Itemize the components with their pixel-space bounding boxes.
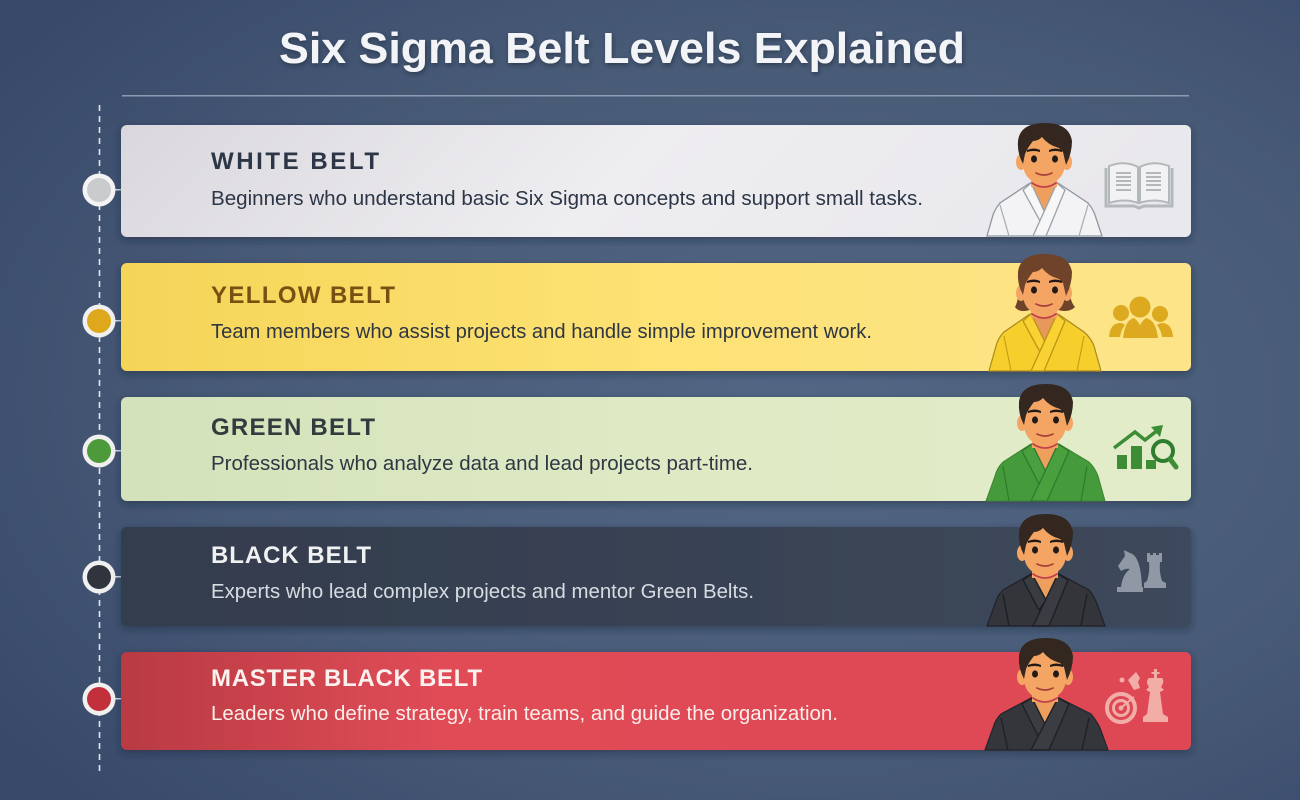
text: black belt description: Experts who lead complex projects and mentor Green Belts. — [211, 581, 754, 603]
heading: white belt: WHITE BELT — [211, 148, 379, 175]
panel: green belt — [121, 384, 1191, 501]
text: white belt description: Beginners who understand basic Six Sigma concepts and support small tasks. — [211, 188, 923, 210]
text: yellow belt description: Team members who assist projects and handle simple improvement work. — [211, 321, 872, 343]
icon: chess knight and rook — [1117, 550, 1166, 592]
icon: open book — [1106, 163, 1172, 208]
figure: person in yellow gi — [989, 254, 1101, 371]
icon: target, arrow and chess king — [1107, 669, 1168, 722]
heading: green belt: GREEN BELT — [211, 414, 375, 441]
panel: black belt — [121, 514, 1191, 626]
text: green belt description: Professionals who analyze data and lead projects part-time. — [211, 453, 753, 475]
marker: white belt — [82, 174, 122, 206]
marker: black belt — [82, 560, 122, 594]
figure: person in green gi — [986, 384, 1105, 501]
marker: master black belt — [82, 682, 122, 716]
figure: person in white gi — [987, 123, 1102, 236]
heading: master black belt: MASTER BLACK BELT — [211, 665, 482, 692]
icon: growth chart with magnifier — [1114, 425, 1176, 469]
text: master black belt description: Leaders who define strategy, train teams, and guide the organization. — [211, 703, 838, 725]
heading: black belt: BLACK BELT — [211, 542, 371, 569]
figure: person in black gi — [987, 514, 1105, 626]
figure: person in dark gi — [985, 638, 1108, 750]
title: Six Sigma Belt Levels Explained — [279, 24, 965, 73]
icon: team of people — [1109, 296, 1173, 338]
panel: yellow belt — [121, 254, 1191, 371]
heading: yellow belt: YELLOW BELT — [211, 282, 395, 309]
marker: yellow belt — [82, 304, 122, 338]
panel: white belt — [121, 123, 1191, 237]
timeline: dashed line with level markers — [82, 105, 122, 775]
marker: green belt — [82, 434, 122, 468]
panel: master black belt — [121, 638, 1191, 750]
